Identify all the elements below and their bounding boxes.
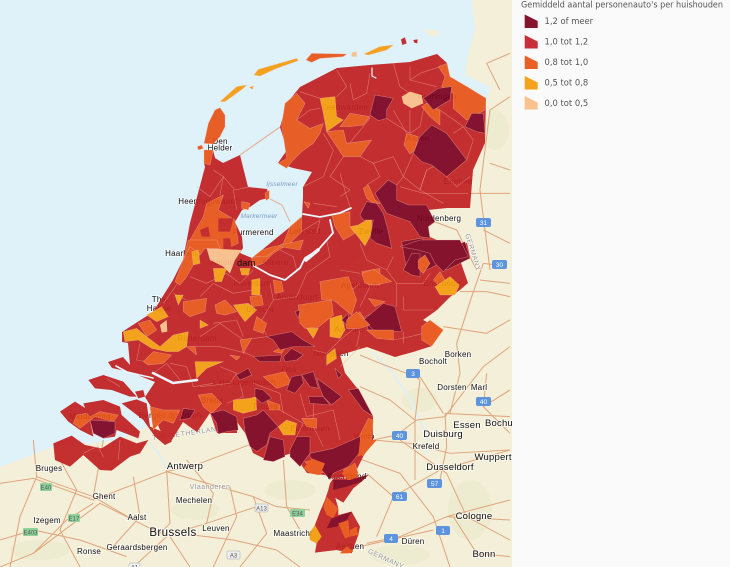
south Limburg classes — [303, 440, 377, 553]
Zeeland islands — [53, 375, 172, 471]
land labels under the choropleth: Tilburg — [252, 402, 278, 411]
road shields: 30 — [496, 262, 503, 269]
land labels under the choropleth: Almere — [262, 258, 289, 267]
land labels under the choropleth: The — [152, 295, 167, 304]
Belgian and German city labels: Cologne — [456, 511, 492, 522]
Belgian and German city labels — [33, 350, 521, 560]
Belgian and German city labels: Borken — [445, 350, 471, 359]
land labels under the choropleth: Bergen op Zoom — [139, 411, 201, 420]
road shields: E40 — [41, 486, 52, 492]
Belgian and German city labels: Bruges — [36, 464, 62, 473]
legend item: 0,0 tot 0,5 — [525, 96, 588, 110]
land labels under the choropleth: Groningen — [417, 92, 457, 101]
region labels: GERMANY — [463, 233, 482, 272]
south regions 0,0 tot 0,5 — [160, 248, 242, 333]
Belgian and German city labels: Bochum — [485, 418, 521, 429]
land labels under the choropleth: Emmen — [444, 177, 472, 186]
road shields: E17 — [69, 516, 80, 522]
land labels under the choropleth: Apeldoorn — [341, 281, 379, 290]
Belgian and German city labels: Dusseldorf — [426, 462, 474, 473]
choropleth map of the Netherlands — [53, 37, 486, 553]
legend item: 0,5 tot 0,8: 0,5 tot 0,8 — [544, 78, 588, 88]
region labels: Vlaanderen — [190, 484, 230, 491]
road network Belgium and south — [0, 440, 510, 567]
Belgian and German city labels: Wuppertal — [475, 452, 519, 463]
south regions 1,2 of meer — [90, 310, 380, 480]
land labels under the choropleth: Amsterdam — [211, 258, 253, 267]
Belgian and German city labels: Mechelen — [176, 496, 212, 505]
municipal boundaries south — [83, 240, 360, 460]
causeway Houtribdijk — [270, 199, 290, 222]
legend item: 0,0 tot 0,5: 0,0 tot 0,5 — [544, 98, 588, 108]
land labels under the choropleth: Assen — [406, 134, 430, 143]
Belgian and German city labels: Bonn — [472, 549, 496, 560]
Belgian and German city labels: Aachen — [336, 542, 364, 551]
east regions 0,8 tot 1,0 — [347, 255, 445, 346]
inner waters of Flevoland and the Delta — [116, 68, 376, 383]
visible Amsterdam label ending: dam — [237, 258, 256, 269]
small island Borkum — [423, 30, 440, 36]
road shields — [23, 218, 507, 567]
road shields: 57 — [431, 481, 438, 488]
road shields: 40 — [396, 433, 403, 440]
region labels: THE NETHERLANDS — [152, 425, 228, 442]
legend item: 1,0 tot 1,2 — [525, 35, 588, 48]
land labels under the choropleth: Den — [212, 137, 228, 146]
road shields: 1 — [441, 528, 445, 535]
south regions 0,5 tot 0,8 — [123, 250, 345, 435]
legend item: 1,2 of meer: 1,2 of meer — [544, 16, 594, 26]
land labels under the choropleth: Hilversum — [233, 279, 271, 288]
road network Germany — [360, 263, 510, 480]
Belgian and German city labels: Ghent — [93, 492, 116, 501]
legend item: 1,2 of meer — [525, 14, 594, 28]
land labels under the choropleth: Arnhem — [334, 325, 364, 334]
sea and lakes — [0, 0, 490, 467]
land labels under the choropleth: Enschede — [423, 279, 461, 288]
legend item: 0,8 tot 1,0 — [525, 56, 588, 69]
land labels under the choropleth: Eindhoven — [290, 424, 330, 433]
legend item: 0,5 tot 0,8 — [525, 76, 588, 90]
Belgian and German city labels: Brussels — [149, 527, 197, 539]
road shields: 4 — [389, 536, 393, 543]
road shields: E403 — [23, 530, 38, 536]
north regions 0,8 tot 1,0 — [190, 53, 486, 267]
land labels under the choropleth: Hague — [147, 304, 172, 313]
Belgian and German city labels: Izegem — [33, 516, 61, 525]
east regions 1,2 of meer — [363, 240, 468, 332]
south Limburg — [310, 475, 368, 553]
region labels — [152, 233, 482, 567]
land labels under the choropleth: Rotterdam — [177, 334, 217, 343]
land labels under the choropleth: Helder — [208, 144, 233, 152]
road shields: 61 — [396, 494, 403, 501]
road shields: 3 — [411, 371, 415, 378]
causeway Afsluitdijk — [240, 127, 280, 155]
south regions 0,8 tot 1,0 — [73, 240, 380, 480]
road shields: 31 — [480, 220, 487, 227]
red pocket in Noord-Holland — [200, 218, 233, 250]
land labels under the choropleth: Nijmegen — [313, 349, 349, 358]
land labels under the choropleth: Heerhugowaard — [178, 197, 238, 206]
land labels under the choropleth: Nordenberg — [417, 214, 461, 223]
legend panel — [512, 0, 730, 567]
water labels: Markermeer — [240, 213, 278, 220]
north regions 1,2 of meer — [360, 87, 485, 270]
north regions 0,5 tot 0,8 — [220, 45, 393, 246]
terrain tint patches — [10, 110, 509, 565]
Belgian and German city labels: Dorsten — [437, 383, 467, 392]
land labels under the choropleth: Utrecht — [246, 305, 274, 314]
municipal boundaries north — [197, 63, 473, 270]
legend item: 0,8 tot 1,0: 0,8 tot 1,0 — [544, 57, 588, 67]
Groningen city 0,0 tot 0,5 — [352, 52, 423, 108]
Belgian and German city labels: Düren — [402, 537, 424, 546]
rivers — [150, 352, 428, 468]
water labels — [240, 181, 298, 220]
road network north Germany — [430, 53, 510, 270]
land labels under the choropleth: Venlo — [353, 432, 375, 441]
water labels: Ijsselmeer — [266, 181, 298, 188]
road shields: A3 — [230, 554, 238, 560]
Belgian and German city labels: Maastricht — [274, 529, 313, 538]
land labels under the choropleth: Leeuwarden — [322, 103, 368, 112]
Belgian and German city labels: Geraardsbergen — [106, 543, 168, 552]
municipal boundaries east — [340, 243, 433, 347]
Belgian and German city labels: Leuven — [202, 524, 230, 533]
Belgian and German city labels: Krefeld — [413, 442, 439, 451]
land labels under the choropleth — [69, 92, 472, 481]
land labels under the choropleth: Haarlem — [165, 249, 197, 258]
Rottum islets — [401, 37, 418, 45]
base municipalities 1,0 tot 1,2 — [108, 54, 486, 478]
Belgian and German city labels: Aalst — [128, 513, 147, 522]
Belgian and German city labels: Essen — [453, 420, 481, 431]
Belgian and German city labels: Ronse — [77, 547, 101, 556]
land labels under the choropleth: Zwolle — [359, 227, 384, 236]
road shields: 40 — [480, 399, 487, 406]
land labels under the choropleth: Lelystad — [289, 227, 321, 236]
land labels under the choropleth: Breda — [201, 396, 224, 405]
legend item: 1,0 tot 1,2: 1,0 tot 1,2 — [544, 36, 588, 46]
Belgian and German city labels: Antwerp — [167, 461, 203, 472]
Belgian and German city labels: Duisburg — [423, 429, 463, 440]
road shields: A13 — [256, 506, 267, 512]
road shields: E34 — [292, 512, 303, 518]
land labels under the choropleth: Purmerend — [232, 228, 274, 237]
Belgian and German city labels: Bocholt — [419, 357, 448, 366]
Belgian and German city labels: Marl — [471, 383, 487, 392]
land labels under the choropleth: Roermond — [328, 472, 366, 481]
land labels under the choropleth: Amersfoort — [276, 293, 318, 302]
land labels under the choropleth: Middelburg — [69, 412, 111, 421]
land labels under the choropleth: 's-Hertogenbosch — [210, 378, 276, 387]
land labels under the choropleth: Oss — [282, 365, 296, 374]
east regions 0,5 tot 0,8 — [435, 277, 459, 295]
